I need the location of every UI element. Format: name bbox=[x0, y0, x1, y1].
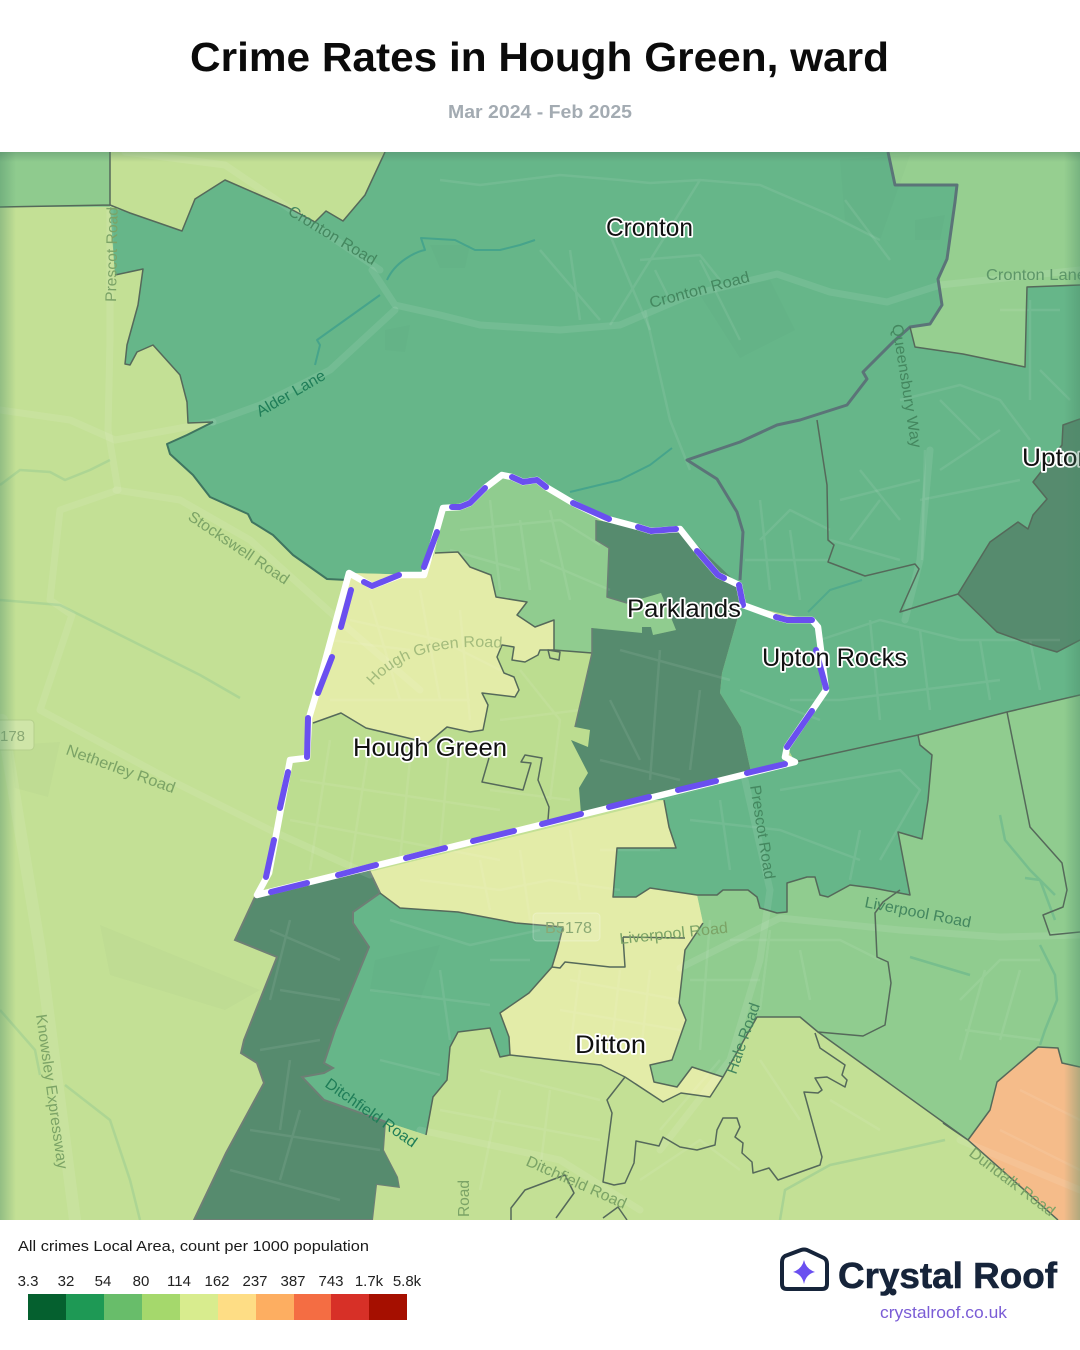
legend ticks: 387 bbox=[280, 1273, 306, 1290]
legend ticks: 114 bbox=[167, 1273, 191, 1290]
place labels bbox=[353, 214, 1080, 1059]
boundaries bbox=[0, 152, 1080, 1220]
legend bbox=[18, 1238, 422, 1320]
road labels: Netherley Road bbox=[64, 742, 178, 797]
road labels: Ditchfield Road bbox=[322, 1075, 420, 1151]
road box: B5178: B5178 bbox=[545, 920, 592, 937]
area: mid light north ward bbox=[435, 475, 676, 653]
area: Dundalk orange bbox=[969, 1048, 1080, 1220]
website link: crystalroof.co.uk bbox=[880, 1304, 1008, 1322]
legend ticks: 162 bbox=[204, 1273, 230, 1290]
area: south central green bbox=[613, 735, 932, 913]
ward boundary bbox=[257, 475, 826, 895]
road labels: Hale Road bbox=[724, 1001, 764, 1076]
residential roads bbox=[230, 175, 1080, 1200]
area: north-east light block bbox=[888, 152, 1080, 367]
road labels: Cronton Road bbox=[648, 269, 752, 312]
place labels: Ditton bbox=[575, 1031, 646, 1059]
road labels: Prescot Road bbox=[103, 207, 122, 302]
area: Cronton and Upton green bbox=[110, 152, 1080, 800]
area: dark east block bbox=[958, 419, 1080, 652]
area: south-east mid green bbox=[650, 695, 1080, 1140]
road labels: Knowsley Expressway bbox=[32, 1013, 71, 1170]
road labels: Liverpool Road bbox=[863, 894, 972, 932]
road labels: Queensbury Way bbox=[888, 323, 924, 449]
road labels: Stockswell Road bbox=[185, 508, 292, 588]
legend ticks bbox=[18, 1273, 422, 1290]
place labels: Parklands bbox=[627, 595, 741, 623]
area: ward base south bbox=[356, 519, 798, 800]
map edge fade bbox=[0, 152, 1080, 1220]
road labels: Cronton Lane bbox=[986, 267, 1080, 284]
area: Upton Rocks green in ward bbox=[699, 547, 823, 770]
map bbox=[0, 152, 1080, 1220]
logo wordmark: Crystal Roof bbox=[838, 1255, 1058, 1296]
ground patches bbox=[10, 155, 945, 1010]
legend ticks: 237 bbox=[242, 1273, 268, 1290]
road labels: Alder Lane bbox=[254, 367, 329, 420]
area: Hough Green north pale bbox=[309, 552, 554, 743]
road labels: Dundalk Road bbox=[966, 1145, 1058, 1220]
subtitle: Mar 2024 - Feb 2025 bbox=[448, 102, 632, 122]
logo key dot bbox=[890, 1288, 896, 1296]
legend ticks: 32 bbox=[58, 1273, 74, 1290]
icon: house with star bbox=[782, 1250, 827, 1289]
road labels: Prescot Road bbox=[746, 784, 778, 880]
area: south lower green bbox=[373, 1122, 1036, 1220]
legend ticks: 80 bbox=[133, 1273, 149, 1290]
place labels: Cronton bbox=[606, 214, 693, 242]
road labels: Hough Green Road bbox=[366, 636, 502, 685]
area: Ditton west green bbox=[302, 893, 563, 1135]
place labels: Upton Rocks bbox=[762, 644, 907, 672]
road box: B5178 bbox=[533, 913, 600, 941]
road labels: Liverpool Road bbox=[619, 920, 729, 948]
road box: 178: 178 bbox=[0, 728, 25, 745]
legend ticks: 1.7k bbox=[355, 1273, 384, 1290]
area: Ditton pale bbox=[369, 800, 723, 1102]
main roads bbox=[0, 152, 1080, 1220]
water features bbox=[0, 238, 1057, 1220]
road labels bbox=[36, 207, 1080, 1216]
road labels: Ditchfield Road bbox=[523, 1153, 629, 1213]
legend ticks: 5.8k bbox=[393, 1273, 422, 1290]
title: Crime Rates in Hough Green, ward bbox=[190, 34, 889, 80]
legend ticks: 743 bbox=[318, 1273, 344, 1290]
road labels: Cronton Road bbox=[285, 203, 379, 269]
area: south-west dark bbox=[194, 870, 400, 1220]
legend ticks: 54 bbox=[95, 1273, 111, 1290]
road labels: Road bbox=[456, 1180, 473, 1217]
legend colour bar bbox=[28, 1294, 407, 1320]
road box: 178 bbox=[0, 720, 34, 750]
legend title: All crimes Local Area, count per 1000 population bbox=[18, 1238, 369, 1255]
place labels: Hough Green bbox=[353, 734, 507, 762]
map base area bbox=[0, 152, 719, 1220]
area: Parklands dark bbox=[571, 520, 751, 814]
legend ticks: 3.3 bbox=[18, 1273, 38, 1290]
logo bbox=[782, 1250, 1058, 1322]
area: top-left block bbox=[0, 152, 110, 207]
